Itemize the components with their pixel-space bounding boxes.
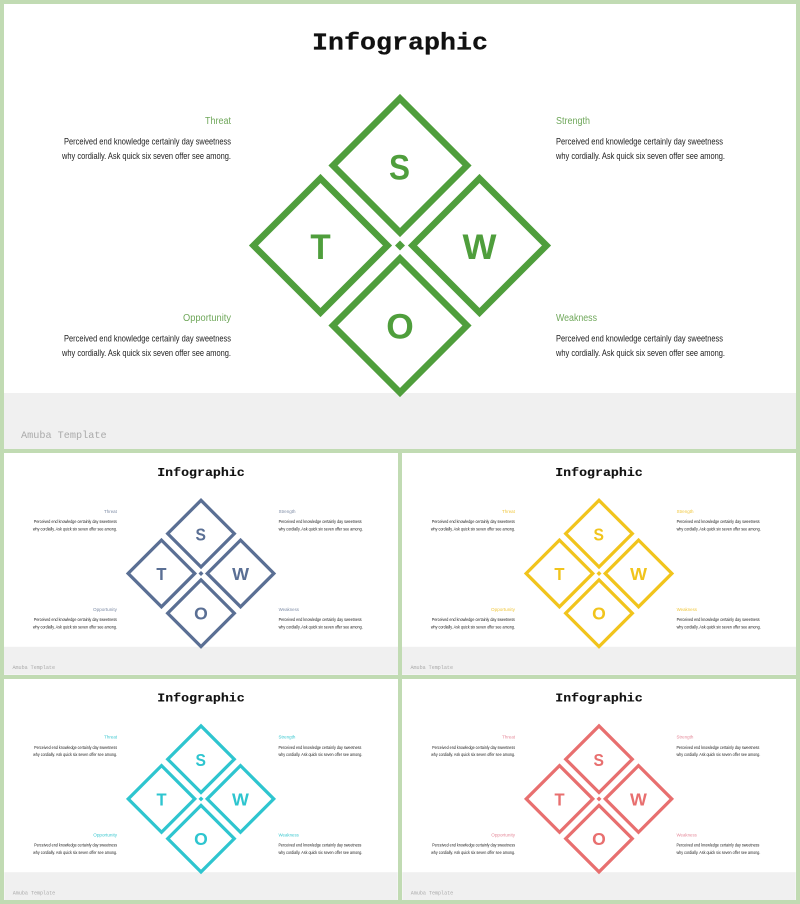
strength text block: Strength bbox=[556, 116, 590, 127]
opportunity text block: why cordially. Ask quick six seven offer see among. bbox=[33, 850, 117, 855]
footer band bbox=[4, 393, 796, 449]
diamond O: O bbox=[194, 604, 208, 624]
weakness text block: Perceived end knowledge certainly day sweetness bbox=[677, 617, 760, 622]
opportunity text block: Perceived end knowledge certainly day sweetness bbox=[432, 617, 516, 622]
title: Infographic bbox=[312, 30, 488, 57]
diamond T: T bbox=[554, 790, 565, 810]
diamond O bbox=[333, 258, 467, 392]
panel: yellow SWOT slide bbox=[402, 453, 796, 675]
threat text block: Perceived end knowledge certainly day sweetness bbox=[34, 519, 118, 524]
opportunity text block: why cordially. Ask quick six seven offer see among. bbox=[431, 624, 515, 629]
strength text block bbox=[676, 735, 760, 757]
weakness text block: Weakness bbox=[676, 832, 697, 838]
threat text block bbox=[33, 735, 118, 757]
footer text: Amuba Template bbox=[13, 891, 55, 897]
strength text block bbox=[677, 509, 761, 531]
weakness text block bbox=[676, 832, 760, 855]
diamond S bbox=[566, 726, 632, 792]
threat text block: why cordially. Ask quick six seven offer see among. bbox=[431, 526, 515, 531]
weakness text block bbox=[278, 832, 362, 855]
weakness text block bbox=[279, 607, 363, 629]
threat text block bbox=[431, 509, 516, 531]
opportunity text block bbox=[33, 607, 118, 629]
diamond W bbox=[207, 766, 274, 832]
title: Infographic bbox=[157, 691, 245, 705]
diamond T bbox=[128, 766, 195, 832]
threat text block: Threat bbox=[502, 735, 516, 741]
strength text block: Strength bbox=[676, 735, 694, 741]
opportunity text block: why cordially. Ask quick six seven offer see among. bbox=[431, 850, 515, 855]
footer band bbox=[4, 647, 398, 675]
strength text block bbox=[279, 509, 363, 531]
diamond W bbox=[605, 766, 672, 832]
diamond T bbox=[128, 540, 195, 607]
threat text block: Perceived end knowledge certainly day sweetness bbox=[432, 519, 516, 524]
diamond T: T bbox=[554, 564, 565, 584]
footer band bbox=[402, 872, 796, 900]
weakness text block: Perceived end knowledge certainly day sweetness bbox=[278, 843, 362, 848]
threat text block: Threat bbox=[104, 509, 117, 515]
panel: red SWOT slide bbox=[402, 679, 796, 900]
strength text block: why cordially. Ask quick six seven offer see among. bbox=[555, 151, 725, 161]
diamond S bbox=[168, 500, 234, 567]
opportunity text block: why cordially. Ask quick six seven offer see among. bbox=[33, 624, 117, 629]
opportunity text block bbox=[33, 832, 118, 855]
threat text block bbox=[33, 509, 118, 531]
opportunity text block: Opportunity bbox=[183, 313, 231, 324]
strength text block: Strength bbox=[278, 735, 296, 741]
footer text: Amuba Template bbox=[411, 891, 453, 897]
weakness text block: why cordially. Ask quick six seven offer see among. bbox=[677, 624, 761, 629]
title: Infographic bbox=[555, 466, 643, 480]
title: Infographic bbox=[157, 466, 245, 480]
footer text: Amuba Template bbox=[410, 665, 453, 671]
footer band bbox=[4, 872, 398, 900]
SWOT diamond diagram bbox=[254, 98, 546, 392]
SWOT diamond diagram bbox=[526, 726, 672, 872]
opportunity text block bbox=[431, 832, 516, 855]
strength text block bbox=[278, 735, 362, 757]
panel: blue SWOT slide bbox=[4, 453, 398, 675]
threat text block: Threat bbox=[104, 735, 118, 741]
diamond T bbox=[254, 178, 388, 312]
weakness text block bbox=[677, 607, 761, 629]
diamond W bbox=[605, 540, 672, 607]
threat text block: Perceived end knowledge certainly day sweetness bbox=[64, 136, 232, 146]
opportunity text block: Opportunity bbox=[491, 607, 515, 613]
weakness text block: why cordially. Ask quick six seven offer see among. bbox=[676, 850, 760, 855]
opportunity text block bbox=[61, 313, 232, 358]
strength text block: Strength bbox=[677, 509, 694, 515]
SWOT diamond diagram bbox=[526, 500, 672, 647]
threat text block: Perceived end knowledge certainly day sweetness bbox=[432, 745, 516, 750]
threat text block bbox=[61, 116, 232, 161]
strength text block: Perceived end knowledge certainly day sweetness bbox=[677, 519, 760, 524]
center dot bbox=[597, 796, 601, 801]
center dot bbox=[597, 571, 601, 576]
opportunity text block: Opportunity bbox=[93, 607, 117, 613]
diamond S bbox=[333, 98, 467, 232]
center dot bbox=[199, 571, 203, 576]
strength text block bbox=[555, 116, 725, 161]
diamond T: T bbox=[156, 564, 167, 584]
SWOT diamond diagram bbox=[128, 500, 274, 647]
diamond O: O bbox=[194, 829, 208, 849]
diamond O bbox=[168, 805, 234, 872]
weakness text block: why cordially. Ask quick six seven offer see among. bbox=[278, 850, 362, 855]
center dot bbox=[395, 240, 405, 250]
threat text block: why cordially. Ask quick six seven offer see among. bbox=[33, 526, 117, 531]
diamond S: S bbox=[594, 750, 604, 770]
weakness text block: Weakness bbox=[556, 313, 597, 324]
diamond T bbox=[526, 766, 593, 832]
diamond W: W bbox=[630, 564, 648, 584]
panel: large green SWOT slide bbox=[4, 4, 796, 449]
diamond O: O bbox=[592, 829, 606, 849]
strength text block: why cordially. Ask quick six seven offer see among. bbox=[676, 752, 760, 757]
center dot bbox=[199, 796, 203, 801]
diamond S bbox=[566, 500, 632, 567]
diamond S: S bbox=[196, 750, 206, 770]
threat text block: why cordially. Ask quick six seven offer see among. bbox=[431, 752, 515, 757]
weakness text block: Perceived end knowledge certainly day sweetness bbox=[676, 843, 760, 848]
strength text block: Strength bbox=[279, 509, 296, 515]
diamond T: T bbox=[310, 228, 331, 267]
diamond S: S bbox=[389, 148, 410, 188]
weakness text block: Weakness bbox=[677, 607, 697, 613]
diamond O bbox=[566, 805, 632, 872]
strength text block: Perceived end knowledge certainly day sweetness bbox=[279, 519, 362, 524]
diamond S: S bbox=[594, 525, 604, 545]
weakness text block: Perceived end knowledge certainly day sweetness bbox=[279, 617, 362, 622]
threat text block: Threat bbox=[502, 509, 515, 515]
diamond O bbox=[168, 580, 234, 647]
opportunity text block bbox=[431, 607, 516, 629]
diamond W: W bbox=[630, 790, 648, 810]
footer text: Amuba Template bbox=[12, 665, 55, 671]
threat text block bbox=[431, 735, 516, 757]
strength text block: Perceived end knowledge certainly day sweetness bbox=[278, 745, 362, 750]
footer band bbox=[402, 647, 796, 675]
opportunity text block: Opportunity bbox=[93, 832, 118, 838]
strength text block: why cordially. Ask quick six seven offer see among. bbox=[677, 526, 761, 531]
title: Infographic bbox=[555, 691, 643, 705]
weakness text block: why cordially. Ask quick six seven offer see among. bbox=[279, 624, 363, 629]
diamond T: T bbox=[156, 790, 167, 810]
opportunity text block: why cordially. Ask quick six seven offer see among. bbox=[61, 348, 231, 358]
opportunity text block: Opportunity bbox=[491, 832, 516, 838]
diamond O: O bbox=[386, 308, 414, 346]
diamond O bbox=[566, 580, 632, 647]
SWOT diamond diagram bbox=[128, 726, 274, 872]
threat text block: Threat bbox=[205, 116, 231, 127]
threat text block: Perceived end knowledge certainly day sweetness bbox=[34, 745, 118, 750]
diamond W bbox=[207, 540, 274, 607]
weakness text block bbox=[555, 313, 725, 358]
weakness text block: Weakness bbox=[278, 832, 299, 838]
panel: teal SWOT slide bbox=[4, 679, 398, 900]
opportunity text block: Perceived end knowledge certainly day sweetness bbox=[34, 843, 118, 848]
diamond W: W bbox=[232, 790, 250, 810]
diamond T bbox=[526, 540, 593, 607]
weakness text block: Perceived end knowledge certainly day sweetness bbox=[556, 334, 724, 344]
diamond W bbox=[412, 178, 546, 312]
diamond W: W bbox=[462, 228, 496, 267]
diamond O: O bbox=[592, 604, 606, 624]
diamond W: W bbox=[232, 564, 250, 584]
opportunity text block: Perceived end knowledge certainly day sweetness bbox=[64, 334, 232, 344]
weakness text block: why cordially. Ask quick six seven offer see among. bbox=[555, 348, 725, 358]
opportunity text block: Perceived end knowledge certainly day sweetness bbox=[432, 843, 516, 848]
diamond S: S bbox=[196, 525, 206, 545]
strength text block: why cordially. Ask quick six seven offer see among. bbox=[278, 752, 362, 757]
opportunity text block: Perceived end knowledge certainly day sweetness bbox=[34, 617, 118, 622]
weakness text block: Weakness bbox=[279, 607, 299, 613]
strength text block: Perceived end knowledge certainly day sweetness bbox=[676, 745, 760, 750]
strength text block: why cordially. Ask quick six seven offer see among. bbox=[279, 526, 363, 531]
footer text: Amuba Template bbox=[21, 430, 107, 442]
threat text block: why cordially. Ask quick six seven offer see among. bbox=[61, 151, 231, 161]
diamond S bbox=[168, 726, 234, 792]
strength text block: Perceived end knowledge certainly day sweetness bbox=[556, 136, 724, 146]
threat text block: why cordially. Ask quick six seven offer see among. bbox=[33, 752, 117, 757]
